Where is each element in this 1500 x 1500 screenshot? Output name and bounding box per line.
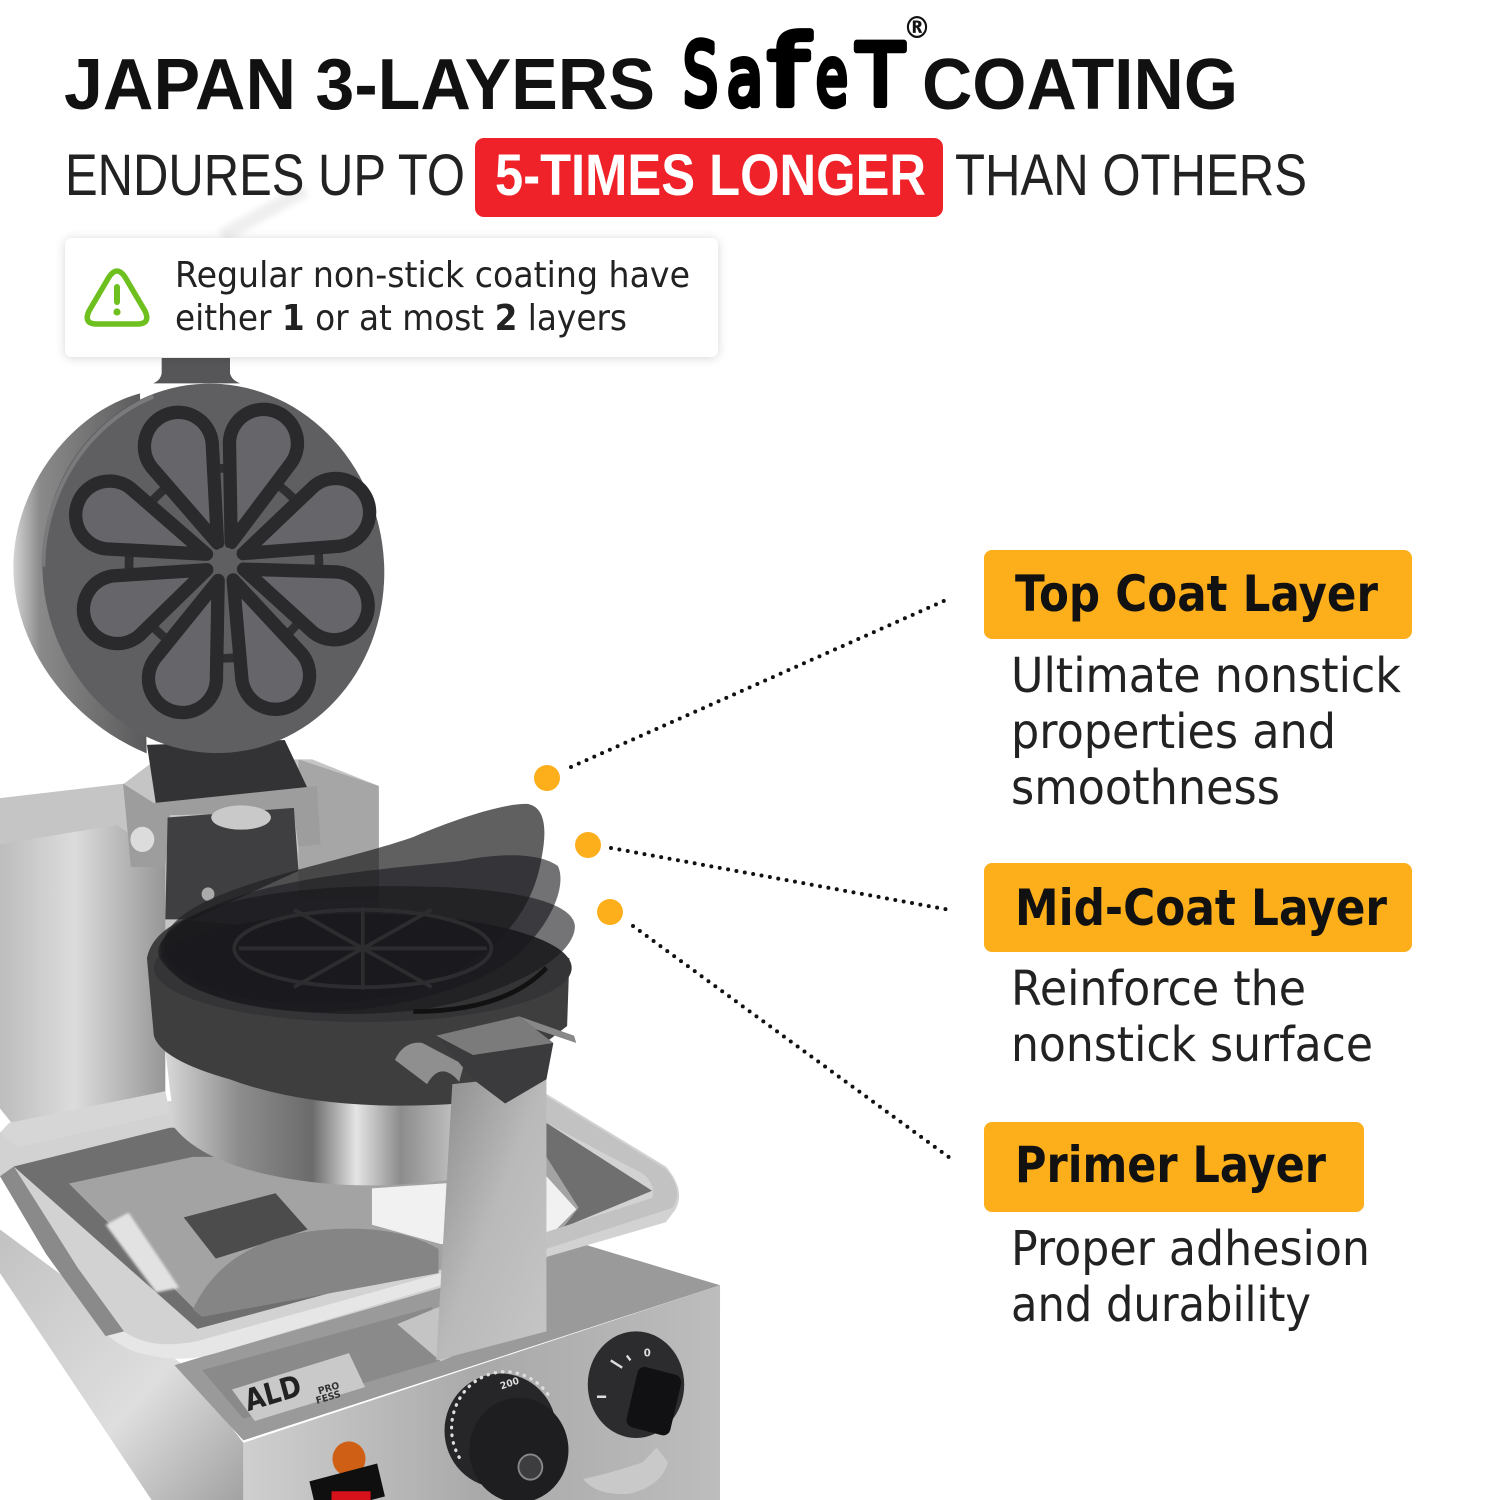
subtitle: THAN OTHERS bbox=[955, 143, 1307, 208]
logo plate: FESS bbox=[315, 1389, 342, 1407]
base left side bbox=[0, 1230, 243, 1500]
title line 1 bbox=[64, 11, 1238, 128]
handle bbox=[153, 358, 240, 383]
lid rim shadow bbox=[13, 393, 147, 753]
description: primer bbox=[1011, 1221, 1370, 1333]
lid face bbox=[19, 361, 408, 775]
waffle maker: base and tray bbox=[0, 740, 720, 1500]
brand name SafeT bbox=[683, 16, 904, 128]
description: mid coat bbox=[1011, 961, 1373, 1073]
note text: either 1 or at most 2 layers bbox=[175, 298, 627, 339]
tray bbox=[0, 1094, 679, 1359]
heading: mid coat: Mid-Coat Layer bbox=[1015, 879, 1387, 937]
base top bbox=[174, 1234, 720, 1440]
description: top coat bbox=[1011, 648, 1401, 816]
heading: top coat bbox=[984, 550, 1412, 639]
layer: primer bbox=[158, 886, 575, 1014]
heading: primer: Primer Layer bbox=[1015, 1136, 1326, 1194]
dot: top coat bbox=[534, 765, 560, 791]
heading: top coat: Top Coat Layer bbox=[1015, 565, 1378, 623]
note text: Regular non-stick coating have bbox=[175, 255, 690, 296]
hinge bbox=[123, 740, 321, 919]
dot: mid coat bbox=[575, 832, 601, 858]
petals bbox=[65, 400, 381, 722]
note text bbox=[175, 255, 690, 339]
layer: mid coat bbox=[160, 855, 560, 1012]
panel: top coat layer bbox=[984, 550, 1412, 816]
description: top coat: Ultimate nonstick bbox=[1011, 648, 1401, 704]
logo plate bbox=[232, 1353, 365, 1421]
brand name SafeT: a bbox=[727, 31, 763, 124]
subtitle: ENDURES UP TO bbox=[65, 143, 465, 208]
description: primer: and durability bbox=[1011, 1277, 1311, 1333]
description: top coat: properties and bbox=[1011, 704, 1336, 760]
brand name SafeT: T bbox=[856, 27, 904, 126]
back box bbox=[0, 759, 379, 934]
logo plate: ALD bbox=[241, 1368, 305, 1418]
temperature dial: 200 bbox=[499, 1375, 521, 1392]
waffle maker: open lid plate bbox=[13, 358, 408, 775]
leader: primer bbox=[633, 926, 950, 1158]
description: mid coat: Reinforce the bbox=[1011, 961, 1306, 1017]
dot: primer bbox=[597, 899, 623, 925]
icon: warning triangle bbox=[87, 271, 147, 324]
stand bbox=[397, 1307, 542, 1361]
plate top bbox=[154, 914, 572, 1022]
faint ghost handle bbox=[222, 190, 305, 236]
logo plate: PRO bbox=[317, 1380, 341, 1397]
title line 1: COATING bbox=[922, 45, 1238, 125]
base front bbox=[243, 1285, 720, 1500]
ring pattern bbox=[129, 468, 319, 658]
registered mark: ® bbox=[903, 11, 931, 46]
indicator lamp bbox=[332, 1441, 366, 1476]
panel: mid coat layer bbox=[984, 863, 1412, 1073]
heading: mid coat bbox=[984, 863, 1412, 952]
layer: top coat bbox=[164, 804, 544, 1004]
brand name SafeT: S bbox=[683, 26, 718, 126]
callout dots and dotted leaders bbox=[534, 600, 950, 1158]
temperature dial bbox=[445, 1372, 568, 1500]
handle block bbox=[436, 1016, 553, 1104]
steel cylinder bbox=[165, 1050, 459, 1185]
heading: primer bbox=[984, 1122, 1364, 1212]
leader: mid coat bbox=[611, 848, 950, 910]
latch bbox=[395, 1043, 464, 1084]
description: mid coat: nonstick surface bbox=[1011, 1017, 1373, 1073]
power dial: 0 bbox=[644, 1347, 651, 1360]
panel: primer layer bbox=[984, 1122, 1370, 1333]
waffle maker: lower plate, layers, stand and controls bbox=[147, 804, 684, 1500]
power dial bbox=[588, 1331, 684, 1438]
title line 1: JAPAN 3-LAYERS bbox=[64, 45, 655, 125]
foot bbox=[583, 1448, 668, 1494]
leader: top coat bbox=[571, 600, 946, 767]
plate band bbox=[147, 919, 569, 1106]
red switch bbox=[309, 1463, 385, 1500]
waffle pattern through layers bbox=[234, 907, 491, 990]
subtitle: 5-TIMES LONGER bbox=[495, 143, 926, 208]
subtitle bbox=[65, 138, 1307, 217]
note card bbox=[65, 238, 718, 357]
description: primer: Proper adhesion bbox=[1011, 1221, 1370, 1277]
brand name SafeT: e bbox=[816, 30, 848, 124]
description: top coat: smoothness bbox=[1011, 760, 1280, 816]
red highlight bbox=[475, 138, 943, 217]
brand name SafeT: f bbox=[768, 16, 810, 128]
